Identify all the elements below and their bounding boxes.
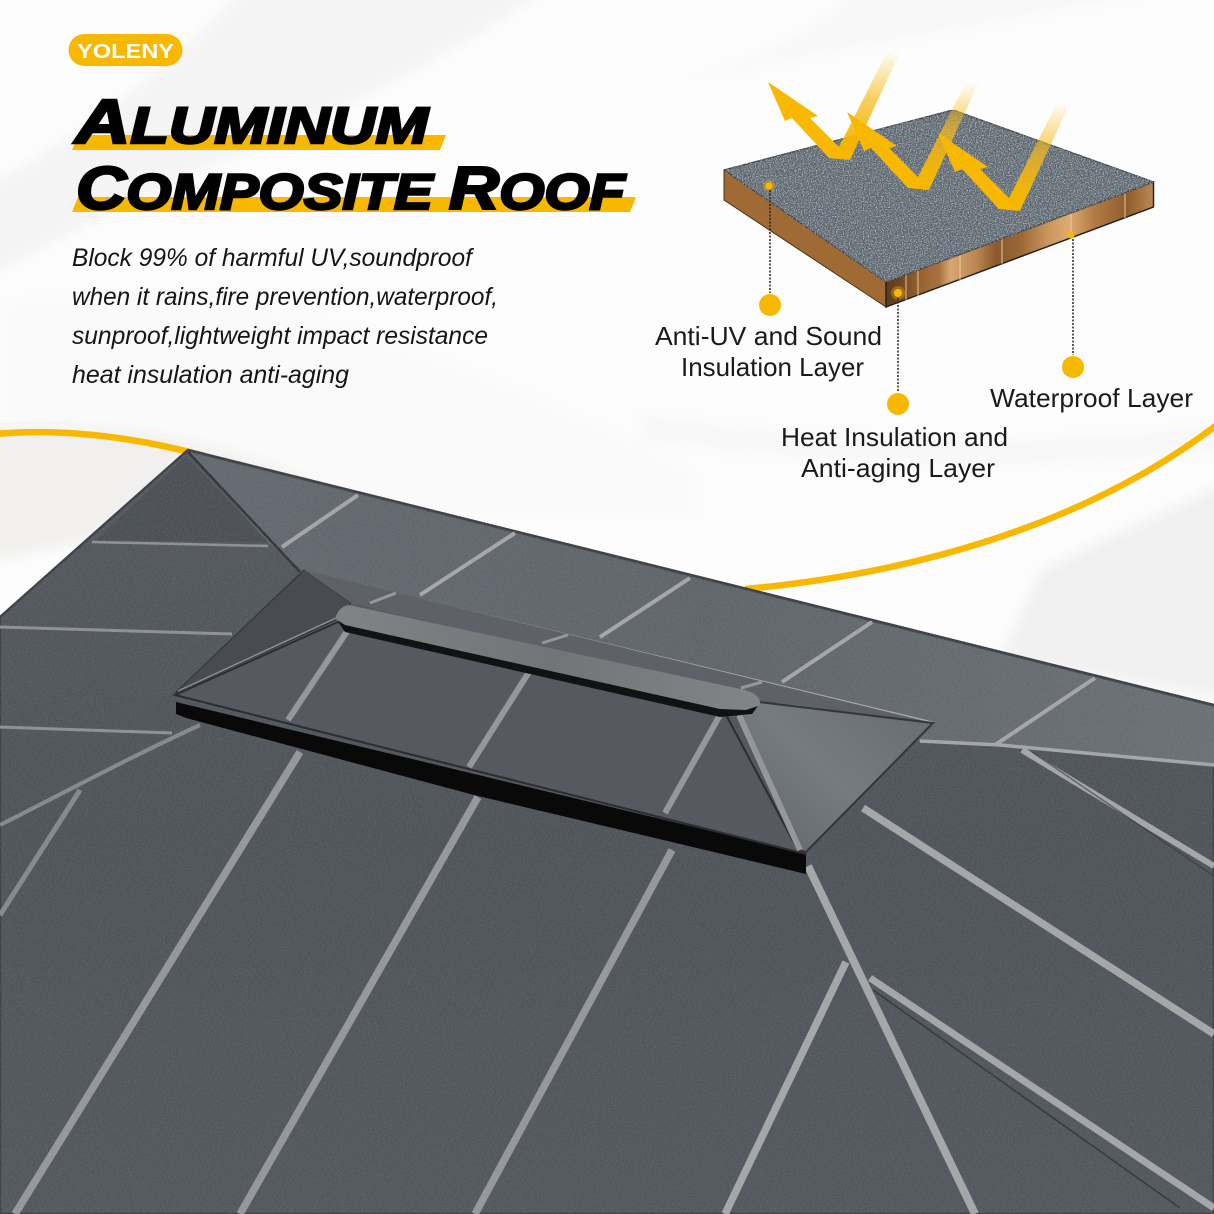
description text: when it rains,fire prevention,waterproof, xyxy=(72,283,498,311)
side facet corner xyxy=(96,456,268,542)
reflected arrow 1 xyxy=(768,52,900,160)
vent back slope xyxy=(304,570,933,723)
callout: heat insulation layer: Heat Insulation and xyxy=(781,422,1008,452)
vent right facet xyxy=(736,702,933,852)
callout: heat insulation layer xyxy=(781,286,1008,483)
vent cap xyxy=(336,605,760,711)
vent cap shadow xyxy=(337,620,758,717)
roof seam lines xyxy=(0,495,1214,1214)
roof surface xyxy=(0,450,1214,1214)
panel top surface xyxy=(724,110,1154,282)
roof dark edge lines xyxy=(188,452,1214,1208)
description text: Block 99% of harmful UV,soundproof xyxy=(72,244,475,272)
title xyxy=(72,88,636,222)
vent shadow edge xyxy=(176,702,806,874)
title line 1: ALUMINUM xyxy=(73,88,430,157)
callout: anti-UV layer xyxy=(655,180,882,382)
honeycomb dividers xyxy=(906,193,1125,300)
callout: anti-UV layer: Insulation Layer xyxy=(681,352,864,382)
description text: heat insulation anti-aging xyxy=(72,361,349,389)
title line 2: COMPOSITE ROOF xyxy=(76,155,627,222)
vent left facet xyxy=(175,570,351,693)
callout: anti-UV layer: Anti-UV and Sound xyxy=(655,321,882,351)
composite panel diagram xyxy=(724,52,1154,307)
brand badge: YOLENY xyxy=(77,40,174,63)
callout: waterproof layer xyxy=(990,232,1193,413)
callout: waterproof layer: Waterproof Layer xyxy=(990,383,1193,413)
description text xyxy=(72,244,498,389)
reflected arrow 2 xyxy=(847,82,979,190)
skylight vent xyxy=(175,570,933,874)
panel honeycomb edge xyxy=(886,182,1154,307)
upper roof band xyxy=(188,452,1214,766)
roof photo xyxy=(0,450,1214,1214)
description text: sunproof,lightweight impact resistance xyxy=(72,322,488,350)
panel left edge xyxy=(724,170,886,307)
yellow curve xyxy=(0,424,1214,589)
title underline bars xyxy=(72,135,636,212)
vent front face xyxy=(175,622,806,854)
roof grain overlay xyxy=(0,450,1214,1214)
reflected arrow 3 xyxy=(938,103,1070,211)
vent seam strips xyxy=(178,593,800,850)
callout: heat insulation layer: Anti-aging Layer xyxy=(801,453,995,483)
brand badge xyxy=(68,34,182,66)
